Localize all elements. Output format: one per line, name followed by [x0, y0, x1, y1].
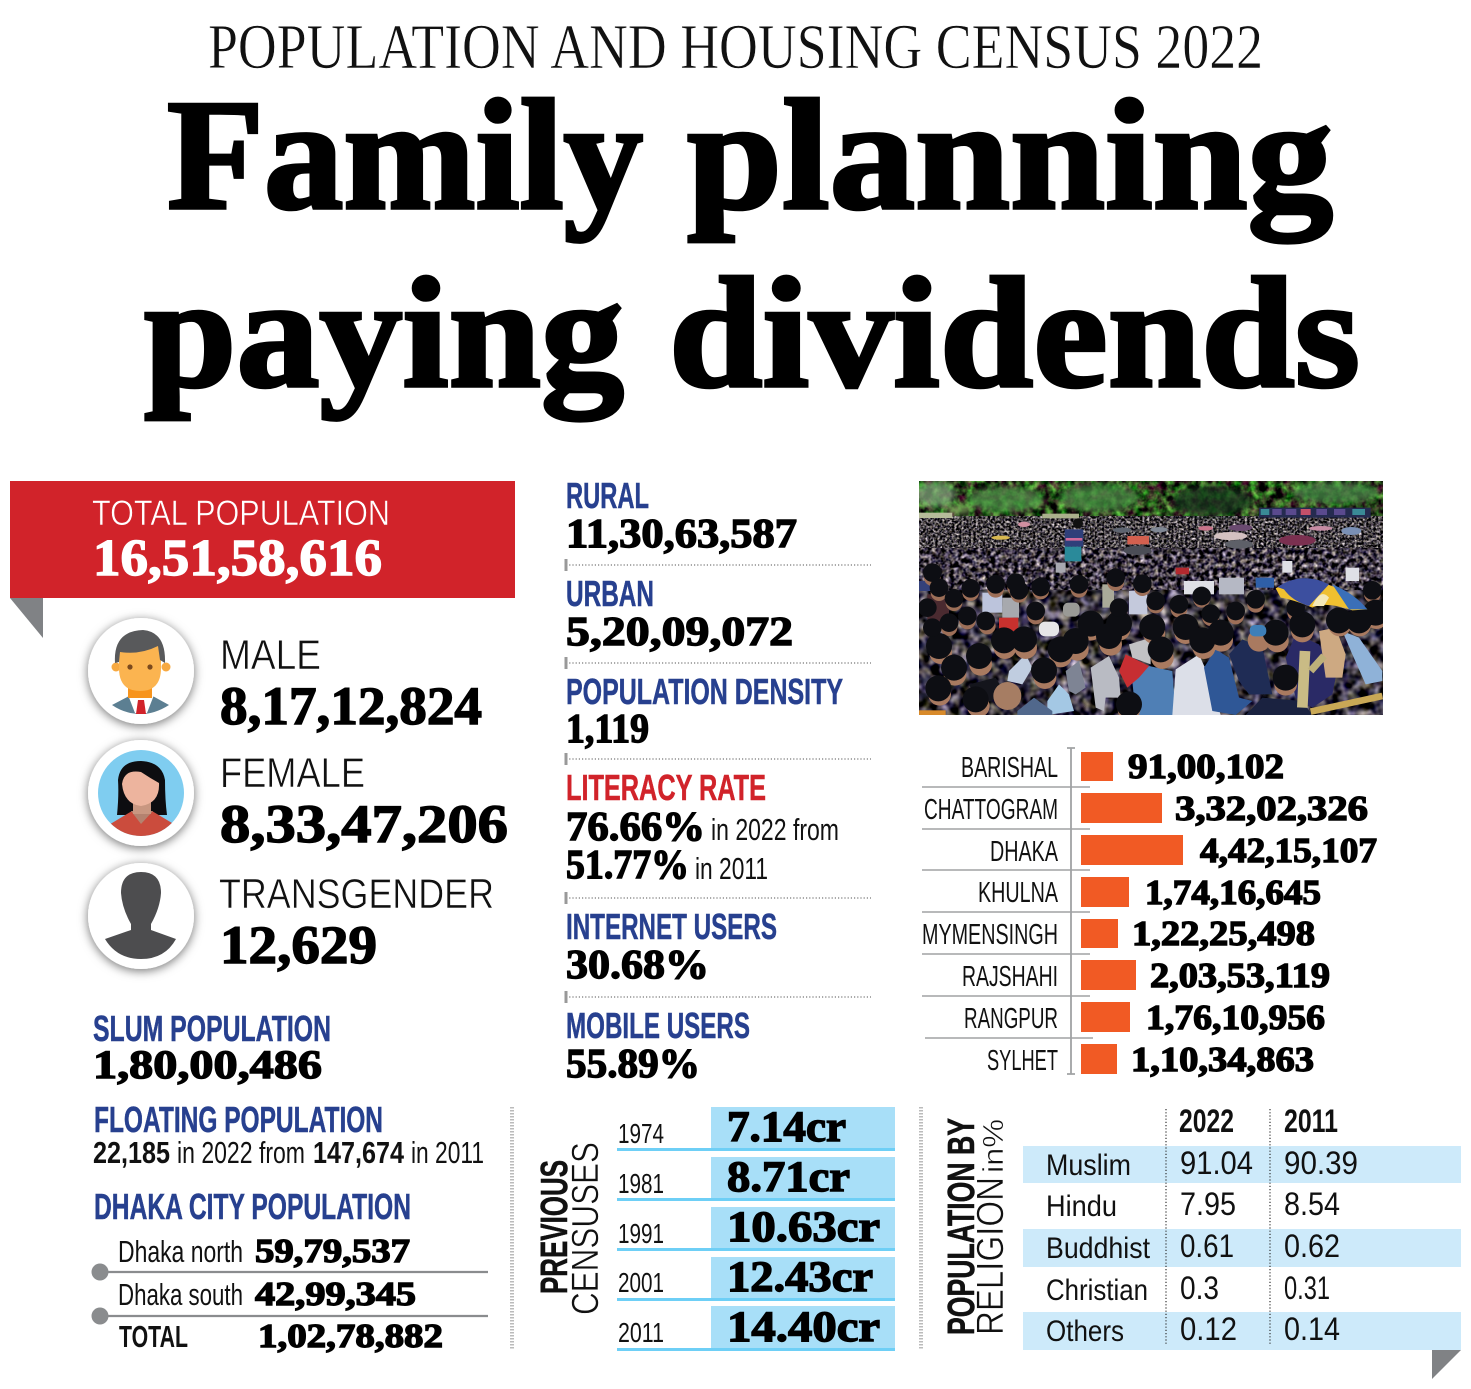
row: Others: Others	[1046, 1315, 1124, 1348]
panel: internet users: INTERNET USERS	[566, 906, 777, 947]
row: Christian	[1046, 1270, 1330, 1307]
panel: population density: POPULATION DENSITY	[566, 671, 843, 712]
row: Sylhet: SYLHET	[987, 1045, 1058, 1077]
panel: total population banner	[10, 481, 515, 638]
panel: floating population: in 2022 from	[177, 1135, 305, 1170]
row: Others: 0.14	[1284, 1311, 1340, 1347]
panel: literacy rate	[566, 767, 871, 904]
panel: internet users: 30.68%	[566, 941, 709, 987]
panel: Dhaka city population: 1,02,78,882	[258, 1318, 443, 1355]
panel: urban	[566, 573, 871, 669]
multicolour umbrella	[1276, 578, 1367, 610]
row: Mymensingh: MYMENSINGH	[922, 919, 1058, 951]
panel: literacy rate: in 2022 from	[711, 812, 839, 847]
total population label: TOTAL POPULATION	[92, 494, 390, 533]
panel: population density	[566, 671, 871, 765]
panel: Dhaka city population: DHAKA CITY POPULATION	[94, 1186, 411, 1227]
panel: floating population: 147,674	[313, 1135, 405, 1170]
photo: crowd of people	[916, 481, 1383, 715]
row: Buddhist: 0.61	[1180, 1228, 1234, 1264]
panel: rural: RURAL	[566, 475, 649, 516]
panel: mobile users: MOBILE USERS	[566, 1005, 750, 1046]
panel: female	[88, 740, 508, 854]
table header: 2011	[1284, 1103, 1338, 1139]
mid shirts	[927, 594, 949, 621]
panel: slum population: 1,80,00,486	[93, 1042, 322, 1087]
panel: Dhaka city population	[92, 1186, 488, 1355]
census 1991	[617, 1204, 895, 1251]
female value: 8,33,47,206	[220, 794, 508, 854]
row: Rajshahi: RAJSHAHI	[962, 961, 1058, 993]
icon: male avatar	[88, 618, 194, 724]
census 1991: 10.63cr	[727, 1204, 880, 1251]
transgender value: 12,629	[220, 915, 377, 975]
dark hair	[938, 613, 1376, 704]
census 1974: 7.14cr	[727, 1104, 846, 1151]
panel: literacy rate: LITERACY RATE	[566, 767, 766, 808]
row: Chattogram: CHATTOGRAM	[924, 794, 1058, 826]
panel: slum population	[93, 1008, 331, 1087]
census 2001	[617, 1254, 895, 1301]
chart axis	[1067, 748, 1075, 1074]
panel: transgender	[88, 863, 494, 975]
rotated heading: population by religion: in%	[978, 1119, 1010, 1173]
row: Hindu: 8.54	[1284, 1186, 1340, 1222]
census 1981	[617, 1154, 895, 1201]
panel: internet users	[566, 906, 871, 1003]
panel: literacy rate: 51.77%	[566, 841, 689, 887]
icon: female avatar	[88, 740, 194, 846]
row: Buddhist: Buddhist	[1046, 1232, 1151, 1265]
panel: population by religion	[921, 1103, 1461, 1350]
row: Rangpur	[964, 998, 1325, 1037]
census 2001: 12.43cr	[727, 1254, 873, 1301]
transgender label: TRANSGENDER	[219, 870, 494, 917]
panel: floating population: 22,185	[93, 1135, 170, 1170]
title: headline: planning	[687, 68, 1333, 243]
title: headline: dividends	[669, 246, 1360, 421]
rotated heading: population by religion	[941, 1118, 1012, 1335]
trees and ground	[916, 482, 1379, 516]
panel: previous censuses	[512, 1104, 895, 1351]
panel: mobile users	[566, 1005, 750, 1086]
title: headline: paying	[144, 246, 624, 421]
panel: Dhaka city population: 42,99,345	[255, 1276, 416, 1313]
row: Muslim	[1046, 1145, 1358, 1182]
row: Chattogram: 3,32,02,326	[1175, 789, 1368, 828]
panel: literacy rate: in 2011	[695, 851, 768, 886]
row: Khulna	[978, 873, 1321, 912]
row: Others	[1046, 1311, 1340, 1348]
census 1991: 1991	[618, 1218, 664, 1249]
table header: 2022	[1179, 1103, 1234, 1139]
census 2011	[617, 1304, 895, 1351]
row: Hindu: Hindu	[1046, 1190, 1117, 1223]
row: Rangpur: 1,76,10,956	[1146, 998, 1325, 1037]
corner fold	[1432, 1350, 1461, 1379]
panel: urban: URBAN	[566, 573, 654, 614]
row: Hindu: 7.95	[1180, 1186, 1236, 1222]
female label: FEMALE	[220, 749, 365, 796]
title: kicker: POPULATION AND HOUSING CENSUS 2022	[208, 11, 1263, 82]
row: Christian: Christian	[1046, 1274, 1148, 1307]
row: Muslim: 90.39	[1284, 1145, 1358, 1181]
title: headline: Family	[167, 68, 643, 243]
panel: rural: 11,30,63,587	[566, 510, 797, 556]
row: Sylhet	[987, 1040, 1314, 1079]
person on shoulders	[1065, 529, 1083, 547]
rotated heading: previous censuses: PREVIOUS	[534, 1160, 576, 1294]
row: Dhaka: 4,42,15,107	[1200, 831, 1377, 870]
row: Christian: 0.3	[1180, 1270, 1219, 1306]
row: Rajshahi	[962, 956, 1330, 995]
bamboo fence	[1302, 651, 1305, 708]
row: Barishal	[961, 747, 1284, 786]
panel: Dhaka city population: Dhaka north	[118, 1234, 243, 1269]
row: Chattogram	[924, 789, 1368, 828]
row: Christian: 0.31	[1284, 1270, 1330, 1306]
census 2011: 2011	[618, 1317, 664, 1348]
table header	[1179, 1103, 1338, 1139]
title: headline	[144, 68, 1360, 421]
row: Dhaka: DHAKA	[990, 836, 1058, 868]
row: Barishal: BARISHAL	[961, 752, 1058, 784]
skin tones	[940, 618, 1376, 709]
census 1974: 1974	[618, 1118, 664, 1149]
foreground shirts	[1132, 666, 1176, 715]
row: Rajshahi: 2,03,53,119	[1150, 956, 1330, 995]
census 2001: 2001	[618, 1267, 664, 1298]
rotated heading: population by religion: POPULATION BY	[941, 1118, 983, 1335]
row: Dhaka	[990, 831, 1377, 870]
panel: Dhaka city population: TOTAL	[119, 1319, 188, 1354]
panel: rural	[566, 475, 871, 571]
panel: floating population	[93, 1099, 484, 1170]
far umbrellas	[1214, 532, 1247, 540]
male label: MALE	[220, 631, 321, 678]
row: Muslim: 91.04	[1180, 1145, 1253, 1181]
row: Rangpur: RANGPUR	[964, 1003, 1058, 1035]
rotated heading: population by religion: RELIGION	[970, 1177, 1012, 1335]
panel: floating population: in 2011	[411, 1135, 484, 1170]
row: Mymensingh: 1,22,25,498	[1132, 914, 1315, 953]
panel: floating population: FLOATING POPULATION	[94, 1099, 383, 1140]
rotated heading: previous censuses: CENSUSES	[565, 1142, 607, 1315]
row: Buddhist: 0.62	[1284, 1228, 1340, 1264]
rotated heading: previous censuses	[534, 1142, 607, 1315]
male value: 8,17,12,824	[220, 676, 482, 736]
census 1981: 1981	[618, 1168, 664, 1199]
panel: literacy rate: 76.66%	[566, 803, 705, 849]
row: Barishal: 91,00,102	[1128, 747, 1284, 786]
panel: slum population: SLUM POPULATION	[93, 1008, 331, 1049]
total population value: 16,51,58,616	[93, 530, 382, 587]
row: Muslim: Muslim	[1046, 1149, 1131, 1182]
bar chart: population by division	[922, 747, 1377, 1079]
census 1974	[617, 1104, 895, 1151]
panel: mobile users: 55.89%	[566, 1040, 700, 1086]
panel: male	[88, 618, 482, 736]
row: Khulna: KHULNA	[978, 877, 1058, 909]
census 1981: 8.71cr	[727, 1154, 850, 1201]
panel: Dhaka city population: 59,79,537	[255, 1233, 410, 1270]
panel: population density: 1,119	[566, 705, 649, 751]
row: Khulna: 1,74,16,645	[1145, 873, 1321, 912]
panel: urban: 5,20,09,072	[566, 608, 793, 654]
row: Buddhist	[1046, 1228, 1340, 1265]
row: Mymensingh	[922, 914, 1315, 953]
row: Hindu	[1046, 1186, 1340, 1223]
row: Others: 0.12	[1180, 1311, 1237, 1347]
panel: Dhaka city population: Dhaka south	[118, 1277, 243, 1312]
icon: silhouette avatar	[88, 863, 194, 969]
census 2011: 14.40cr	[727, 1304, 880, 1351]
row: Sylhet: 1,10,34,863	[1131, 1040, 1314, 1079]
